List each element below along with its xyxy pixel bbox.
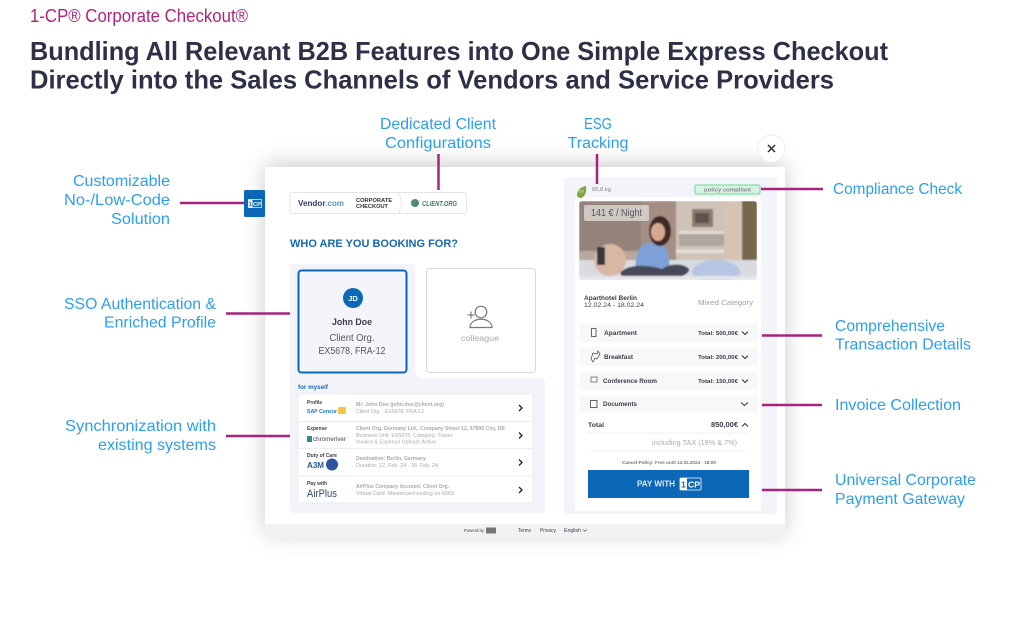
row: apartment (580, 323, 758, 342)
callout: customizable: Customizable (73, 173, 170, 190)
icon: CO2 leaf: CO (578, 190, 584, 194)
callout: SSO: SSO Authentication & (64, 296, 216, 313)
integrations list: Invoice & Expense Upload: Active (356, 440, 436, 446)
callout: ESG: ESG (584, 116, 612, 133)
card: colleague (426, 268, 536, 372)
window footer (265, 524, 785, 537)
callout: payment: Payment Gateway (835, 491, 965, 508)
icon: CO2 leaf (577, 186, 586, 198)
integrations list: Duration: 12. Feb. 24 - 18. Feb. 24 (356, 463, 438, 469)
callout: customizable (64, 173, 244, 228)
card: John Doe: John Doe (332, 317, 372, 328)
right summary panel (564, 177, 777, 514)
co-branding bar: CHECKOUT (356, 204, 389, 210)
callout: compliance: Compliance Check (833, 181, 963, 198)
integrations list: Duty of Care (307, 453, 337, 459)
title: Bundling All Relevant B2B Features into One Simple Express Checkout (30, 36, 888, 66)
integrations list: AirPlus (307, 488, 337, 500)
row: apartment: Apartment (604, 330, 638, 337)
pay button (588, 470, 749, 498)
badge: 1CP: CP (253, 202, 261, 208)
booking heading: WHO ARE YOU BOOKING FOR? (290, 238, 458, 250)
window footer: Powerd by (464, 528, 485, 534)
integrations list: chromeriver (313, 437, 346, 443)
price tag: 141 € / Night (591, 208, 642, 219)
callout: comprehensive: Transaction Details (835, 336, 971, 354)
left grey panel (290, 264, 545, 513)
row: documents (580, 395, 758, 413)
co-branding bar: CLIENT.ORG (422, 199, 457, 208)
row: conference room: Conference Room (603, 378, 657, 385)
callout: synchronization: existing systems (98, 437, 216, 454)
price tag (584, 205, 649, 221)
row: documents: Documents (603, 401, 637, 408)
title (30, 36, 888, 94)
hotel details (584, 295, 753, 309)
total: 850,00€ (711, 420, 739, 429)
pay button: CP (688, 480, 700, 490)
row: breakfast: Breakfast (604, 354, 634, 361)
integrations list: Mr. John Doe (john.doe@client.org) (356, 402, 444, 408)
callout: invoice: Invoice Collection (835, 397, 961, 414)
card: John Doe (298, 270, 406, 372)
integrations list: SAP Concur (307, 409, 338, 415)
co-branding bar: CORPORATE (356, 198, 393, 204)
card: John Doe: Client Org. (330, 333, 374, 344)
integrations list: Business Unit: EX5678, Category: Travel (356, 433, 452, 439)
close button (758, 135, 785, 162)
integrations list: Profile (307, 400, 322, 406)
callout: SSO: Enriched Profile (104, 314, 216, 332)
callout: SSO (64, 296, 290, 332)
badge: 1CP: 1 (249, 202, 253, 208)
pay button: 1 (681, 480, 686, 490)
co-branding bar (290, 192, 466, 214)
integrations list: Destination: Berlin, Germany (356, 456, 426, 462)
window footer: English (564, 528, 581, 534)
integrations list (298, 394, 533, 503)
badge: 1CP (244, 190, 265, 217)
row: breakfast: Total: 200,00€ (698, 355, 739, 361)
card: John Doe: JD (348, 294, 358, 303)
integrations list: A3M (307, 461, 324, 470)
integrations list: Client Org. , EX5678, FRA-12 (356, 409, 424, 415)
callout: dedicated client: Dedicated Client (380, 116, 497, 133)
co-branding bar: Vendor.com (298, 199, 344, 208)
integrations list: Pay with (307, 481, 327, 487)
hotel details: 12.02.24 - 18.02.24 (584, 302, 644, 309)
callout: customizable: Solution (111, 211, 170, 228)
card: colleague: colleague (461, 334, 500, 343)
callout: synchronization (65, 418, 290, 454)
window footer: Privacy (540, 528, 556, 534)
for myself label: for myself (298, 384, 329, 391)
window footer: Terms (518, 528, 531, 534)
callout: comprehensive (762, 318, 971, 354)
card: John Doe: EX5678, FRA-12 (318, 346, 386, 357)
badge: policy compliant: policy compliant (704, 188, 751, 194)
callout: dedicated client (380, 116, 497, 190)
total: Cancel-Policy: Free until 12.02.2024 - 18:00 (622, 460, 717, 465)
title: Directly into the Sales Channels of Vendors and Service Providers (30, 64, 834, 94)
integrations list: Expense (307, 426, 327, 432)
total: Total (588, 422, 604, 429)
pay button: PAY WITH (637, 480, 675, 488)
icon: add person (468, 306, 492, 328)
integrations list: Virtual Card: Mastercard ending on 6069 (356, 491, 454, 497)
hotel photo (579, 201, 757, 284)
total: including TAX (19% & 7%) (652, 440, 737, 447)
hotel details: Mixed Category (698, 298, 753, 307)
CO2 value: 85,8 kg (592, 187, 611, 193)
integrations list: Client Org. Germany Ltd., Company Street 12, 67890 City, DE (356, 426, 506, 432)
checkout window (265, 164, 785, 537)
row: conference room: Total: 150,00€ (698, 379, 739, 385)
row: breakfast (580, 347, 758, 366)
total (588, 420, 749, 465)
callout: payment: Universal Corporate (835, 472, 976, 489)
callout: ESG: Tracking (568, 135, 628, 152)
callout: dedicated client: Configurations (385, 135, 491, 152)
callout: synchronization: Synchronization with (65, 418, 216, 435)
callout: ESG (568, 116, 628, 184)
integrations list: AirPlus Company Account: Client Org. (356, 484, 450, 490)
callout: payment (762, 472, 976, 508)
callout: comprehensive: Comprehensive (835, 318, 945, 335)
badge: policy compliant (695, 185, 760, 194)
eyebrow: 1-CP® Corporate Checkout® (30, 6, 248, 26)
hotel details: Aparthotel Berlin (584, 295, 637, 302)
row: apartment: Total: 500,00€ (698, 331, 739, 337)
callout: customizable: No-/Low-Code (64, 192, 170, 209)
row: conference room (580, 372, 758, 390)
